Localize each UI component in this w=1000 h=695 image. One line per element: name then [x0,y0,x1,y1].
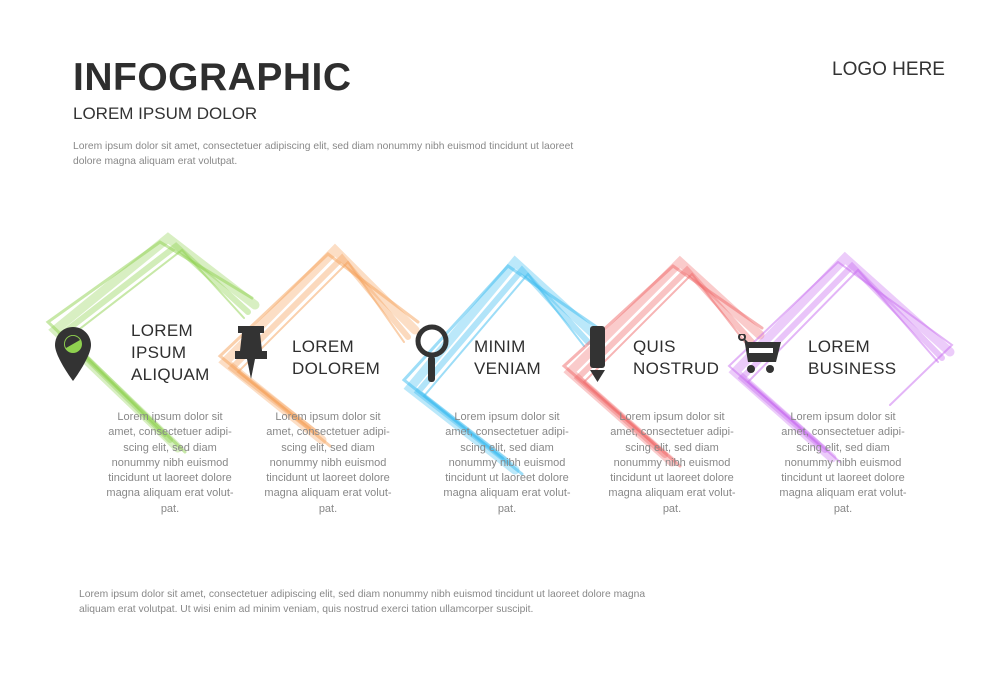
body 5: pat. [834,503,852,515]
body 4: magna aliquam erat volut- [608,487,736,499]
heading 4 [633,337,719,378]
subtitle: LOREM IPSUM DOLOR [73,104,257,123]
logo: LOGO HERE [832,59,945,80]
heading 3 [474,337,541,378]
body 5: scing elit, sed diam [796,442,890,454]
body 3: magna aliquam erat volut- [443,487,571,499]
body 3 [443,411,571,515]
intro text: Lorem ipsum dolor sit amet, consectetuer adipiscing elit, sed diam nonummy nibh euismod tincidunt ut laoreet dolore magna aliquam erat volutpat. [73,141,573,167]
body 3: nonummy nibh euismod [449,457,565,469]
body 4: amet, consectetuer adipi- [610,426,734,438]
brush: red [564,262,762,466]
body 4: nonummy nibh euismod [614,457,730,469]
brush: purple [729,258,952,462]
title: INFOGRAPHIC [73,56,352,99]
body 5: Lorem ipsum dolor sit [790,411,896,423]
heading 2: DOLOREM [292,359,380,378]
body 5: amet, consectetuer adipi- [781,426,905,438]
heading 1 [131,321,210,384]
heading 3: VENIAM [474,359,541,378]
body 2: nonummy nibh euismod [270,457,386,469]
body 2: magna aliquam erat volut- [264,487,392,499]
body 1: tincidunt ut laoreet dolore [108,472,232,484]
body 2: amet, consectetuer adipi- [266,426,390,438]
body 2: scing elit, sed diam [281,442,375,454]
icon: shopping cart [738,334,781,373]
body 3: Lorem ipsum dolor sit [454,411,560,423]
body 5 [779,411,907,515]
heading 2 [292,337,380,378]
icon: push pin [235,326,267,379]
body 3: scing elit, sed diam [460,442,554,454]
body 1: Lorem ipsum dolor sit [117,411,223,423]
heading 3: MINIM [474,337,526,356]
brush: green [48,238,255,452]
body 5: nonummy nibh euismod [785,457,901,469]
brush: blue [404,262,598,474]
body 1: pat. [161,503,179,515]
body 2: Lorem ipsum dolor sit [275,411,381,423]
heading 4: QUIS [633,337,676,356]
heading 4: NOSTRUD [633,359,719,378]
heading 5 [808,337,896,378]
body 2: pat. [319,503,337,515]
body 1 [106,411,234,515]
brush: orange [220,250,418,446]
body 3: pat. [498,503,516,515]
body 4: scing elit, sed diam [625,442,719,454]
body 3: tincidunt ut laoreet dolore [445,472,569,484]
icon: map pin [55,327,91,381]
heading 1: IPSUM [131,343,186,362]
heading 5: LOREM [808,337,870,356]
body 4: tincidunt ut laoreet dolore [610,472,734,484]
heading 1: ALIQUAM [131,365,210,384]
body 1: magna aliquam erat volut- [106,487,234,499]
body 2 [264,411,392,515]
footer text: Lorem ipsum dolor sit amet, consectetuer adipiscing elit, sed diam nonummy nibh euismod tincidunt ut laoreet dolore magna aliquam erat volutpat. Ut wisi enim ad minim veniam, quis nostrud exerci tation ullamcorper suscipit. [79,589,645,615]
body 4: pat. [663,503,681,515]
body 3: amet, consectetuer adipi- [445,426,569,438]
body 2: tincidunt ut laoreet dolore [266,472,390,484]
body 5: magna aliquam erat volut- [779,487,907,499]
body 5: tincidunt ut laoreet dolore [781,472,905,484]
icon: pencil [590,326,605,382]
heading 2: LOREM [292,337,354,356]
body 4: Lorem ipsum dolor sit [619,411,725,423]
heading 1: LOREM [131,321,193,340]
heading 5: BUSINESS [808,359,896,378]
body 1: nonummy nibh euismod [112,457,228,469]
body 1: amet, consectetuer adipi- [108,426,232,438]
body 1: scing elit, sed diam [123,442,217,454]
icon: magnifier [416,324,448,382]
body 4 [608,411,736,515]
